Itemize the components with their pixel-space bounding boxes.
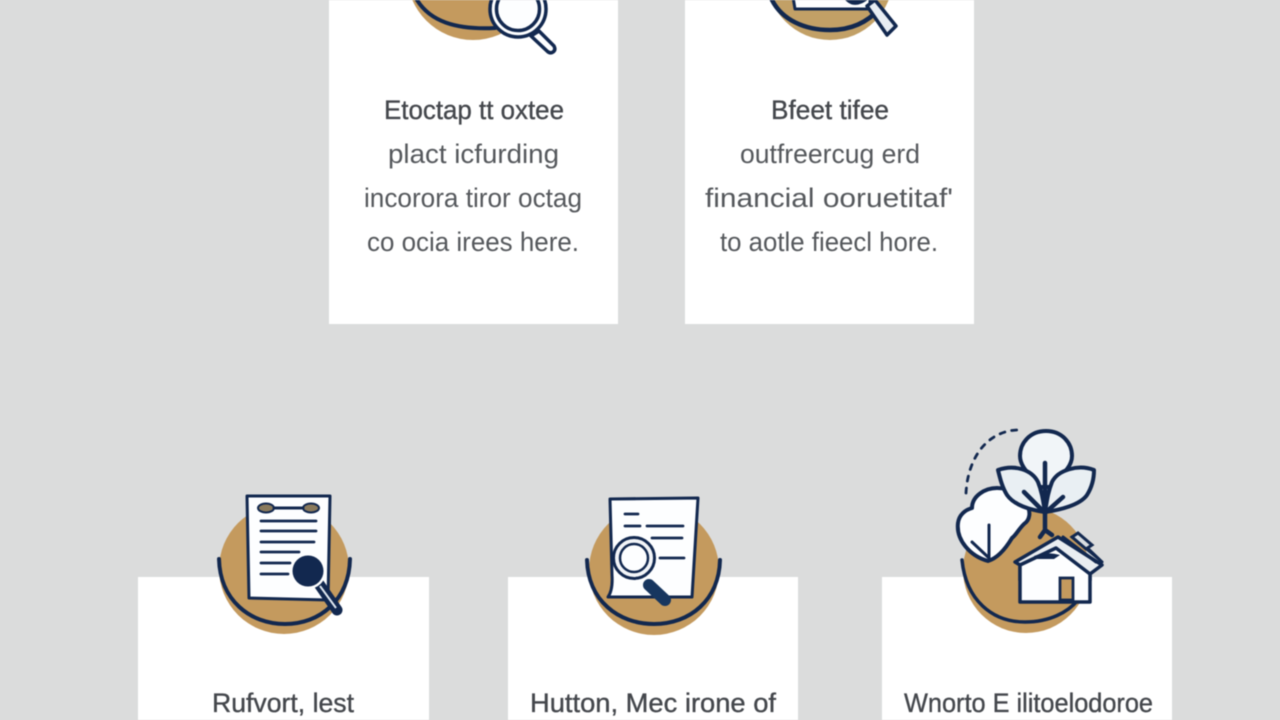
plant stem xyxy=(1024,463,1063,537)
panel: bottom right card xyxy=(882,430,1172,720)
icon: magnifier over tan circle xyxy=(407,0,555,53)
text block: top right card: financial ooruetitaf' xyxy=(705,183,953,213)
icon: document and magnifier over tan circle xyxy=(767,0,896,40)
house body xyxy=(1020,548,1090,602)
panel: top right card xyxy=(685,0,974,324)
icon: plant, tree and house xyxy=(958,430,1102,633)
text block: top right card: Bfeet tifee xyxy=(771,95,889,125)
text block: top right card: outfreercug erd xyxy=(740,139,920,169)
house door xyxy=(1060,578,1073,600)
text: bottom right card: Wnorto E ilitoelodoroe xyxy=(904,688,1153,718)
text: bottom middle card: Hutton, Mec irone of xyxy=(530,688,776,718)
icon: report with solid magnifier xyxy=(219,496,350,634)
text block: top left card xyxy=(364,95,582,257)
tree blob xyxy=(958,488,1029,561)
panel: bottom middle card xyxy=(508,498,798,720)
text block: top right card xyxy=(705,95,953,257)
panel: top left card xyxy=(329,0,618,324)
text block: top left card: co ocia irees here. xyxy=(367,227,579,257)
house roof xyxy=(1015,537,1102,580)
text block: top left card: Etoctap tt oxtee xyxy=(384,95,564,125)
plant left leaf xyxy=(998,468,1045,512)
text block: top right card: to aotle fieecl hore. xyxy=(720,227,938,257)
text block: top left card: plact icfurding xyxy=(388,139,559,169)
text: bottom left card: Rufvort, lest xyxy=(212,688,354,718)
plant top leaf xyxy=(1020,431,1072,487)
panel: bottom left card xyxy=(138,496,429,720)
plant right leaf xyxy=(1045,468,1094,512)
text block: top left card: incorora tiror octag xyxy=(364,183,582,213)
icon: document with outlined magnifier xyxy=(587,498,720,635)
dashed orbit xyxy=(966,430,1023,493)
